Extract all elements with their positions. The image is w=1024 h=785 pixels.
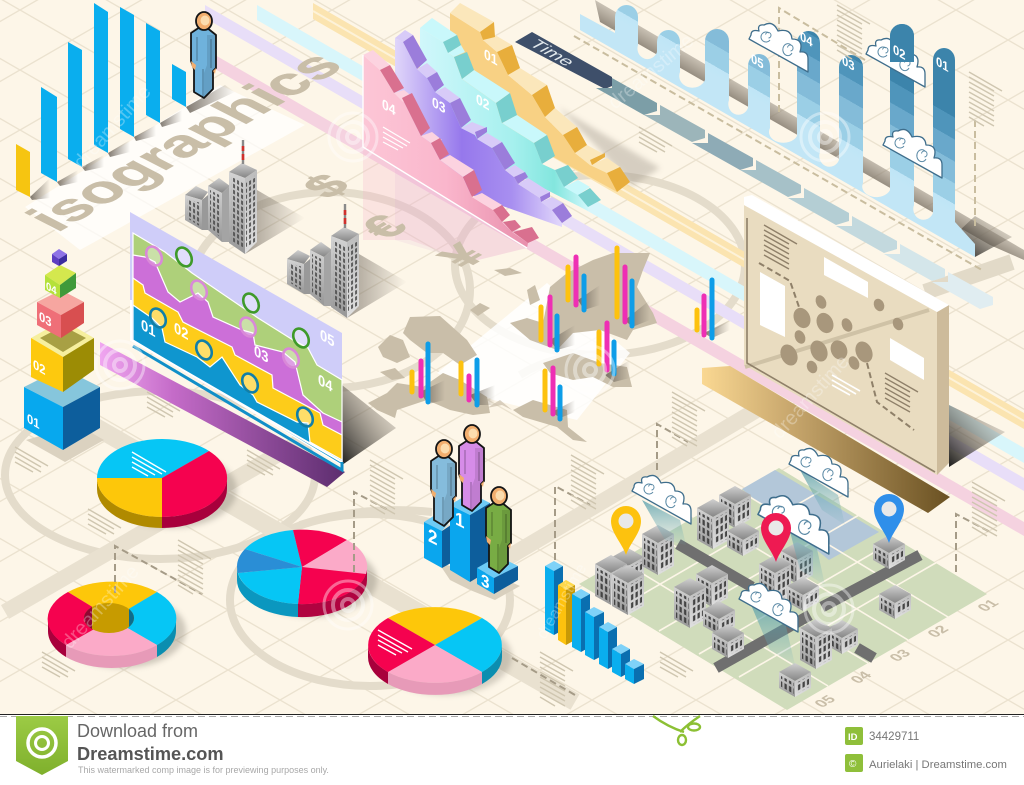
- cube stack: 03: [39, 308, 52, 330]
- 3D bar chart: [545, 561, 644, 684]
- cube stack: 01: [27, 410, 40, 432]
- buildings group 2: [287, 204, 407, 318]
- background rings and strips: [5, 175, 1012, 702]
- panel: left layered chart: [100, 212, 396, 487]
- colored ribbons: [205, 3, 1024, 536]
- city map: [579, 448, 1003, 710]
- icon: scissors: [653, 716, 700, 745]
- panel numbers: 02: [174, 319, 188, 344]
- area chart 02 cyan: 02: [476, 90, 490, 114]
- pin: blue: [874, 494, 904, 543]
- watermark text: dreamstime: [767, 351, 854, 443]
- clouds over hill chart: [749, 23, 942, 178]
- dashed callouts near pies and map: [115, 424, 990, 695]
- currency symbols: ¥: [427, 237, 498, 275]
- pie chart 1: [97, 439, 237, 528]
- pin: yellow: [611, 506, 641, 555]
- currency symbols: $: [291, 167, 362, 205]
- podium with people: 1: [455, 508, 465, 534]
- axis labels: 03: [886, 647, 915, 664]
- title: isographics: isographics: [14, 44, 356, 239]
- person on top chart: [191, 12, 216, 98]
- footer text: download: [77, 721, 329, 775]
- stacked area charts: [363, 3, 660, 262]
- beige board: [702, 195, 1005, 513]
- footer text: download: Download from: [77, 721, 198, 741]
- id badge: 34429711: [869, 731, 919, 743]
- buildings: [595, 486, 911, 697]
- footer text: download: Dreamstime.com: [77, 744, 224, 764]
- panel numbers: 03: [254, 342, 268, 367]
- icon: dreamstime badge: [16, 716, 68, 775]
- hill chart: columns 01-05: 04: [800, 28, 813, 51]
- area chart 04 pink: [363, 50, 539, 262]
- hill chart: columns 01-05: 01: [936, 53, 949, 75]
- floor band under title: [25, 85, 305, 250]
- clouds over hill chart: 02: [893, 41, 906, 63]
- person purple: [459, 425, 484, 511]
- ribbon gradient shadow behind the hill chart: [595, 0, 1024, 260]
- bar chart: top-left columns: [16, 3, 235, 200]
- podium with people: [424, 425, 520, 600]
- footer: [0, 714, 1024, 785]
- watermark text: dreamstime: [57, 561, 144, 653]
- board bubbles: [777, 294, 905, 375]
- watermark text: dreamstime: [69, 81, 156, 173]
- panel numbers: 04: [318, 371, 333, 397]
- area chart 03 purple: 03: [432, 93, 446, 117]
- area chart 01 orange: 01: [484, 45, 498, 69]
- pie chart 3: [237, 530, 377, 617]
- watermark text: dreamstime: [534, 561, 590, 642]
- clouds: [632, 448, 848, 632]
- panel numbers: [141, 316, 334, 397]
- hill chart: columns 01-05: 02: [893, 41, 906, 63]
- hill chart: columns 01-05: 03: [842, 52, 855, 74]
- cube stack: 04: [46, 280, 57, 299]
- time arrow: Time: [526, 36, 578, 69]
- podium with people: 2: [428, 525, 438, 551]
- panel numbers: 05: [320, 326, 334, 351]
- cloud beams: [642, 470, 845, 665]
- axis labels: 01: [974, 597, 1003, 614]
- dashed callout lines: upper right: [574, 8, 982, 270]
- area chart 04 pink: 04: [382, 95, 396, 119]
- cube stack: [24, 249, 104, 462]
- copyright badge: [845, 754, 1007, 772]
- copyright badge: ©: [849, 759, 857, 770]
- map bars: [412, 248, 730, 419]
- pie chart 2: donut: [48, 582, 186, 668]
- board base strip: [702, 366, 950, 513]
- watermark text: [57, 30, 854, 653]
- area chart 03 purple: [395, 30, 572, 227]
- podium with people: 3: [481, 570, 490, 593]
- currency symbols: €: [349, 208, 419, 246]
- buildings group 1: [185, 140, 305, 254]
- copyright badge: Aurielaki | Dreamstime.com: [869, 759, 1007, 771]
- cube stack: 02: [33, 356, 46, 378]
- watermark swirls: [96, 113, 853, 633]
- person blue: [431, 440, 456, 526]
- panel base strip: [100, 342, 345, 487]
- panel marker circles: [143, 244, 316, 429]
- id badge: [845, 727, 919, 745]
- axis labels: 04: [847, 669, 876, 686]
- id badge: ID: [848, 732, 858, 743]
- footer text: download: This watermarked comp image is for previewing purposes only.: [78, 765, 329, 775]
- pin: red: [761, 513, 791, 562]
- person green: [486, 487, 511, 573]
- hill chart: columns 01-05: 05: [751, 50, 764, 72]
- panel numbers: 01: [141, 316, 155, 341]
- axis labels: 02: [924, 623, 953, 640]
- watermark text: dreamstime: [604, 30, 698, 114]
- roads: [678, 544, 920, 668]
- axis labels: [811, 597, 1003, 710]
- currency symbols: [291, 167, 498, 275]
- world map: [368, 253, 657, 442]
- area chart 01 orange: [450, 3, 630, 192]
- time arrow: [515, 32, 993, 309]
- hill chart: columns 01-05: [580, 5, 1012, 257]
- area chart 02 cyan: [420, 18, 601, 211]
- pie chart 4: [368, 607, 512, 695]
- axis labels: 05: [811, 693, 840, 710]
